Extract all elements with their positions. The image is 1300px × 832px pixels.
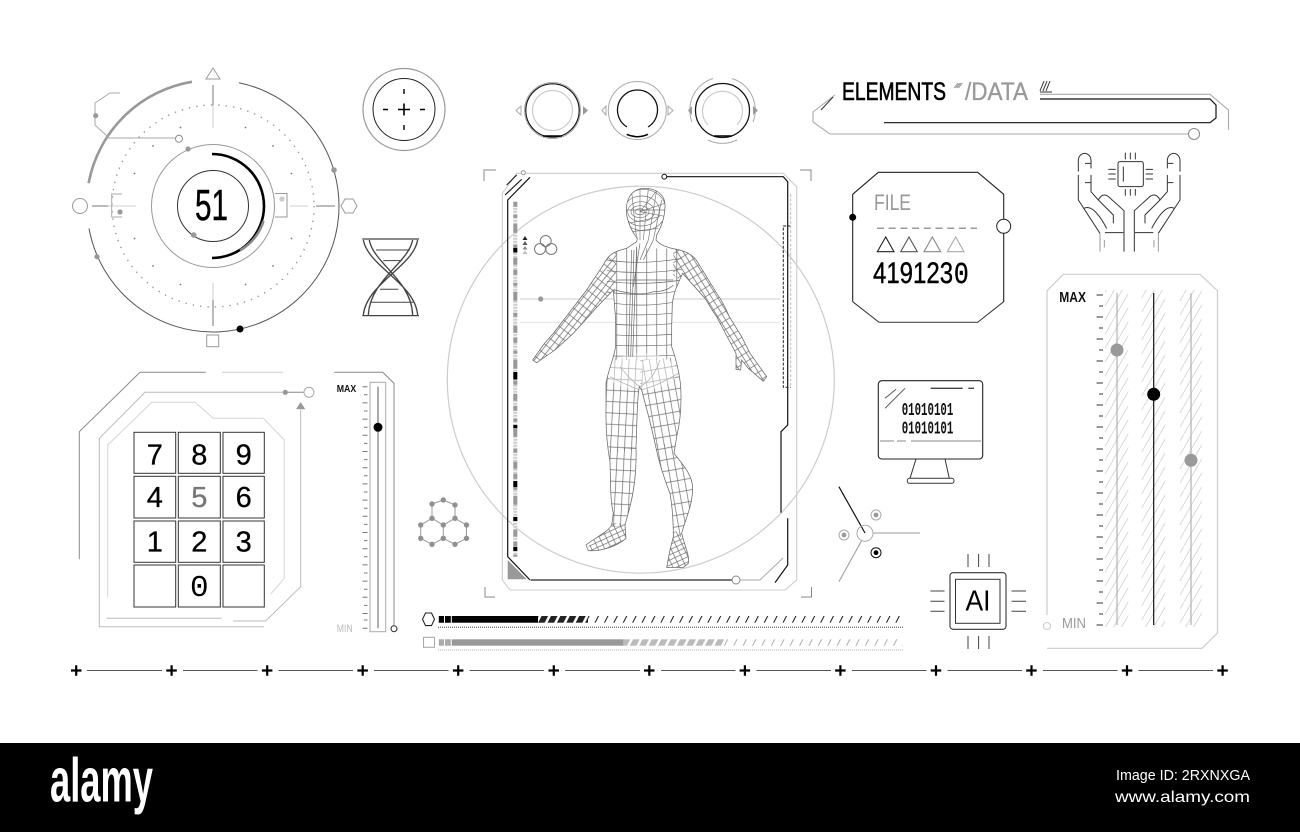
binary line 1: 01010101: [902, 401, 953, 421]
icon: hands holding chip: [1078, 153, 1180, 252]
header: elements / data: [813, 78, 1228, 140]
hub node diagram: [839, 487, 920, 582]
inner ring: [373, 78, 435, 140]
thick grey arc: [89, 82, 192, 183]
outer light frame: [502, 173, 797, 590]
outer frame light segment: [222, 371, 283, 373]
knob: [374, 423, 382, 432]
left dot: [849, 214, 856, 221]
key digits: 7: [147, 439, 163, 471]
heading DATA: /DATA: [965, 78, 1028, 106]
arrow stem frame: [107, 410, 301, 621]
file number: 4191230: [873, 255, 969, 293]
key digits: 5: [191, 482, 207, 514]
square: [424, 637, 434, 647]
octagon top: [853, 172, 1004, 302]
AI label: AI: [966, 586, 990, 618]
connector node: [285, 391, 304, 393]
top triangle: [206, 68, 220, 79]
inner dark frame: [884, 99, 1216, 123]
progress arc grey section: [240, 221, 264, 250]
node left: [839, 530, 849, 540]
frame end circle: [391, 626, 397, 632]
dashed side gauge: [783, 226, 791, 387]
icon: DNA helix: [362, 239, 419, 316]
knob 3: [1184, 454, 1198, 467]
target reticle: [363, 68, 445, 150]
hub circle: [857, 525, 873, 541]
hatch mark right: [1040, 81, 1052, 92]
bottom node: [732, 576, 740, 584]
bottom light line: [740, 558, 783, 580]
ticks: [383, 89, 425, 130]
bar squares: [439, 639, 451, 646]
track 1: [1116, 293, 1118, 625]
second scan line: [520, 321, 780, 323]
connector circle: [304, 387, 314, 397]
knob 2: [1147, 388, 1160, 401]
dotted line: [438, 649, 903, 651]
open arc: [618, 90, 658, 127]
black ring: [696, 84, 750, 138]
value 51: 51: [195, 181, 228, 230]
dotted line: [438, 626, 903, 628]
MAX label: MAX: [1059, 289, 1086, 306]
chip body: [950, 573, 1006, 629]
arrows: [516, 106, 521, 115]
small dial 2: [602, 82, 673, 140]
hatch mark: [954, 83, 962, 88]
node lower: [871, 548, 881, 558]
inner ring: [152, 144, 274, 268]
bottom square: [207, 335, 219, 347]
small dial 3: [688, 78, 758, 143]
dense hatch: [623, 639, 724, 646]
outer ring: [524, 82, 580, 138]
bar squares: [439, 616, 451, 623]
alamy logo text: alamy: [50, 746, 153, 816]
key digits: [147, 439, 252, 606]
top node: [662, 174, 667, 179]
node upper: [871, 510, 881, 520]
key digits: 3: [236, 527, 252, 559]
frame end circle: [1044, 622, 1050, 630]
grey spoke right: [873, 532, 920, 534]
heading ELEMENTS: ELEMENTS: [842, 78, 946, 106]
connector dot: [283, 390, 288, 395]
frame accent: [821, 97, 833, 110]
wireframe human figure: [523, 183, 777, 573]
key digits: 4: [147, 482, 163, 514]
progress arc: [212, 154, 264, 258]
triangle row: [877, 237, 964, 252]
key digits: 8: [191, 439, 207, 471]
key digits: 6: [236, 482, 252, 514]
track line upper: [377, 387, 379, 427]
outer ring arc: [89, 83, 339, 332]
frame nodes: [521, 171, 525, 175]
icon: monitor: [878, 381, 983, 483]
screen: [878, 381, 983, 459]
pins: [930, 554, 1026, 649]
right hexagon: [341, 199, 357, 213]
panel: triple slider: [1044, 274, 1218, 648]
inner arc: [703, 91, 742, 125]
dense hatch: [538, 616, 588, 623]
marker dots: [93, 113, 337, 332]
outer frame: [813, 94, 1228, 134]
outer ring: [363, 68, 445, 150]
track line lower: [377, 427, 379, 628]
connector callout: [95, 93, 175, 138]
glare: [885, 388, 905, 408]
right arrow: [753, 106, 758, 115]
key digits: 1: [147, 527, 163, 559]
black ring: [526, 84, 579, 137]
hatch bands: [1105, 290, 1128, 627]
up arrow: [296, 402, 305, 409]
right arrow: [668, 106, 673, 115]
middle frame: [99, 392, 283, 627]
inner square: [956, 579, 1000, 623]
big circle: [447, 186, 834, 573]
gauge light line: [790, 194, 792, 387]
knob 1: [1110, 344, 1124, 356]
panel: file card: [849, 172, 1011, 322]
small dial 1: [516, 82, 588, 138]
bottom node: [714, 135, 732, 137]
barcode column: [513, 202, 517, 557]
key digits: 2: [191, 527, 207, 559]
solid fill: [452, 639, 623, 646]
MIN label: MIN: [337, 623, 353, 635]
outer ring: [608, 82, 666, 140]
FILE label: FILE: [874, 190, 911, 215]
thick bottom line: [531, 579, 732, 581]
outer frame: [334, 372, 394, 625]
hexagon: [422, 613, 434, 626]
image id: Image ID: 2RXNXGA: [1116, 767, 1250, 784]
right arrow: [583, 106, 588, 115]
corner triangle: [508, 560, 527, 579]
base: [907, 478, 954, 483]
progress bar 1: [422, 613, 903, 627]
panel: keypad: [79, 372, 314, 627]
vertical slider: [334, 372, 397, 635]
screen divider: [880, 440, 981, 442]
dashed line: [877, 227, 977, 229]
thin hatch: [588, 616, 903, 623]
crosshair: [398, 104, 410, 116]
left arrow: [602, 106, 606, 115]
thin hatch: [724, 639, 903, 646]
small molecule icon: [534, 236, 557, 254]
right bracket: [275, 194, 287, 217]
scan dot: [538, 296, 543, 302]
inner ring: [532, 90, 572, 130]
keys: [134, 432, 264, 607]
track 2: [1153, 293, 1155, 625]
binary line 2: 01010101: [902, 419, 953, 439]
MIN label: MIN: [1062, 615, 1086, 632]
panel: central body scan: [447, 170, 834, 597]
icon: molecule: [418, 497, 469, 547]
scan lines: [520, 298, 780, 300]
right circle: [997, 219, 1011, 233]
key digits: 0: [190, 571, 209, 606]
left bracket: [112, 194, 122, 217]
solid fill: [452, 616, 538, 623]
plus divider row: [71, 665, 1228, 676]
bottom arc: [627, 134, 648, 137]
end circle: [1188, 128, 1200, 140]
octagon bottom: [853, 302, 1004, 322]
MAX label: MAX: [337, 383, 356, 395]
outer frame: [79, 372, 206, 559]
inner frame: [108, 402, 284, 597]
crosshair ticks: [92, 85, 335, 326]
corner brackets: [484, 170, 812, 597]
center ring: [178, 170, 248, 242]
divider lines: [87, 670, 1213, 672]
scale ticks: [1096, 295, 1103, 625]
key digits: 9: [236, 439, 252, 471]
left circle: [72, 198, 88, 214]
progress bar 2: [424, 637, 903, 650]
corner hatch: [505, 175, 522, 195]
inner dot ring: [134, 128, 292, 284]
connector end circle: [176, 135, 182, 142]
tiny triangles: [522, 236, 528, 254]
hatch band centre: [1142, 290, 1165, 627]
stand: [910, 459, 949, 478]
track 3: [1190, 293, 1192, 625]
dotted ring: [112, 105, 314, 307]
top dashes: [931, 387, 974, 389]
crosshair light ticks: [108, 105, 308, 300]
left arrow: [688, 106, 692, 115]
footer bar: [0, 743, 1300, 832]
frame: [1047, 274, 1218, 648]
grey spoke lower: [839, 540, 862, 582]
scale ticks: [362, 387, 368, 628]
bottom node: [543, 135, 562, 137]
black spoke: [839, 487, 865, 533]
icon: AI chip: [930, 554, 1026, 649]
dark frame top: [508, 177, 788, 583]
outer arcs: [690, 78, 755, 143]
track box: [370, 382, 386, 632]
plus marks: [71, 665, 1228, 676]
hatch band right: [1180, 290, 1202, 627]
radar dial: [72, 68, 357, 347]
website: www.alamy.com: [1114, 789, 1250, 806]
